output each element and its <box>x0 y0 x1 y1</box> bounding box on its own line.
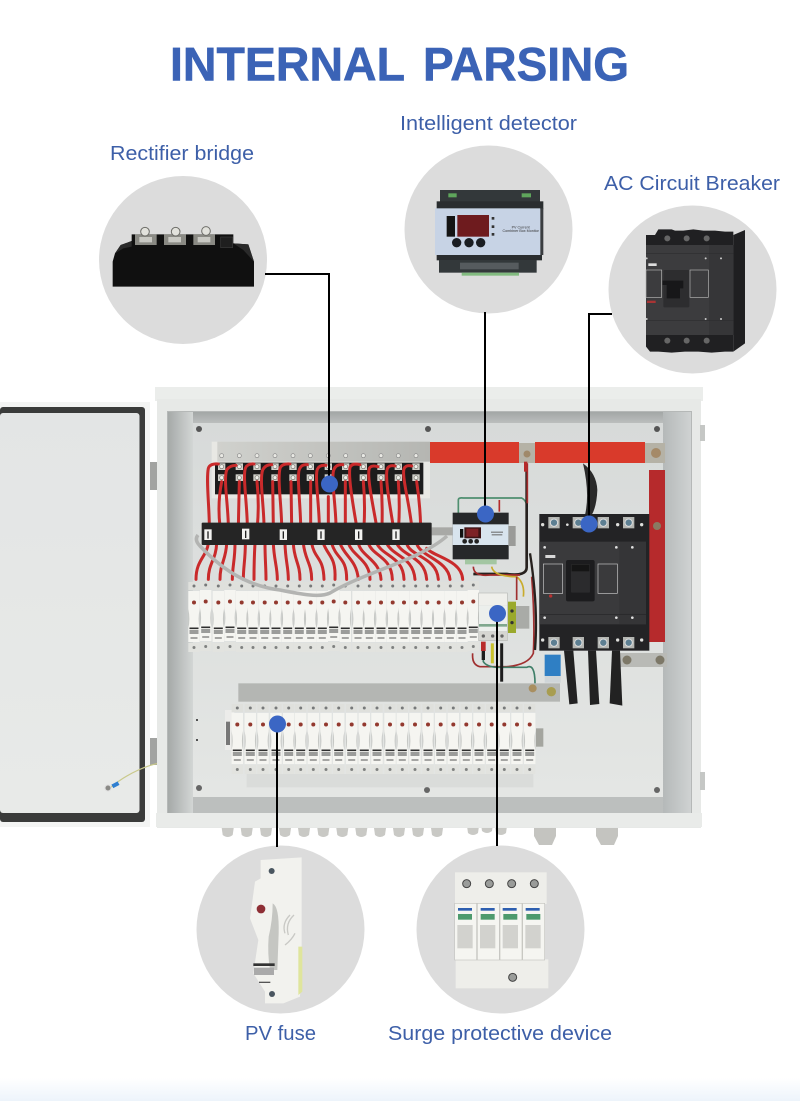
AC circuit breaker in enclosure <box>539 463 649 706</box>
circle: Surge protective device <box>416 846 584 1014</box>
red wires above duct <box>208 464 421 527</box>
title <box>170 38 629 90</box>
icon: circuit breaker <box>646 229 745 353</box>
icon: detector unit: Combiner Box Monitor <box>502 229 540 233</box>
icon: detector unit: PV Current <box>512 225 530 229</box>
leader line: PV fuse <box>276 724 278 847</box>
label: AC Circuit Breaker: AC Circuit Breaker <box>604 173 780 195</box>
grey ribbon cable <box>196 535 447 595</box>
label: PV fuse: PV fuse <box>245 1023 316 1045</box>
wire duct <box>202 523 432 545</box>
leader line: AC circuit breaker <box>589 314 612 524</box>
bottom fade band <box>0 1078 800 1101</box>
icon: surge protector <box>455 872 548 988</box>
circle: PV fuse <box>196 846 364 1014</box>
enclosure body <box>155 387 705 828</box>
marker dots <box>269 476 598 732</box>
open enclosure door <box>0 402 172 827</box>
circle: Intelligent detector <box>404 146 572 314</box>
surge protector and terminals in enclosure <box>478 593 529 641</box>
title: PARSING <box>423 38 629 90</box>
icon: fuse holder <box>250 857 302 1003</box>
label: Intelligent detector: Intelligent detector <box>400 113 577 135</box>
din rail with mounting bar <box>196 683 560 787</box>
red wires below duct <box>196 543 463 579</box>
icon: rectifier module <box>113 227 254 287</box>
title: INTERNAL <box>170 38 405 90</box>
cable glands under enclosure <box>222 824 618 845</box>
bottom row of fuse holders <box>232 704 535 774</box>
leader line: rectifier bridge <box>265 274 329 484</box>
control wiring bundle <box>458 462 536 683</box>
rectifier bridges and wiring <box>196 442 463 579</box>
din rail stub <box>432 527 457 535</box>
icon: detector unit <box>435 190 543 276</box>
top row of fuse holders <box>188 581 479 652</box>
intelligent detector in enclosure <box>453 513 516 564</box>
label: Surge protective device: Surge protective device <box>388 1023 612 1045</box>
leader line: intelligent detector <box>484 312 486 514</box>
circle: Rectifier bridge <box>99 176 267 344</box>
leader line: surge protective device <box>496 613 498 846</box>
red copper busbar <box>430 442 667 667</box>
label: Rectifier bridge: Rectifier bridge <box>110 143 254 165</box>
circle: AC Circuit Breaker <box>608 206 776 374</box>
